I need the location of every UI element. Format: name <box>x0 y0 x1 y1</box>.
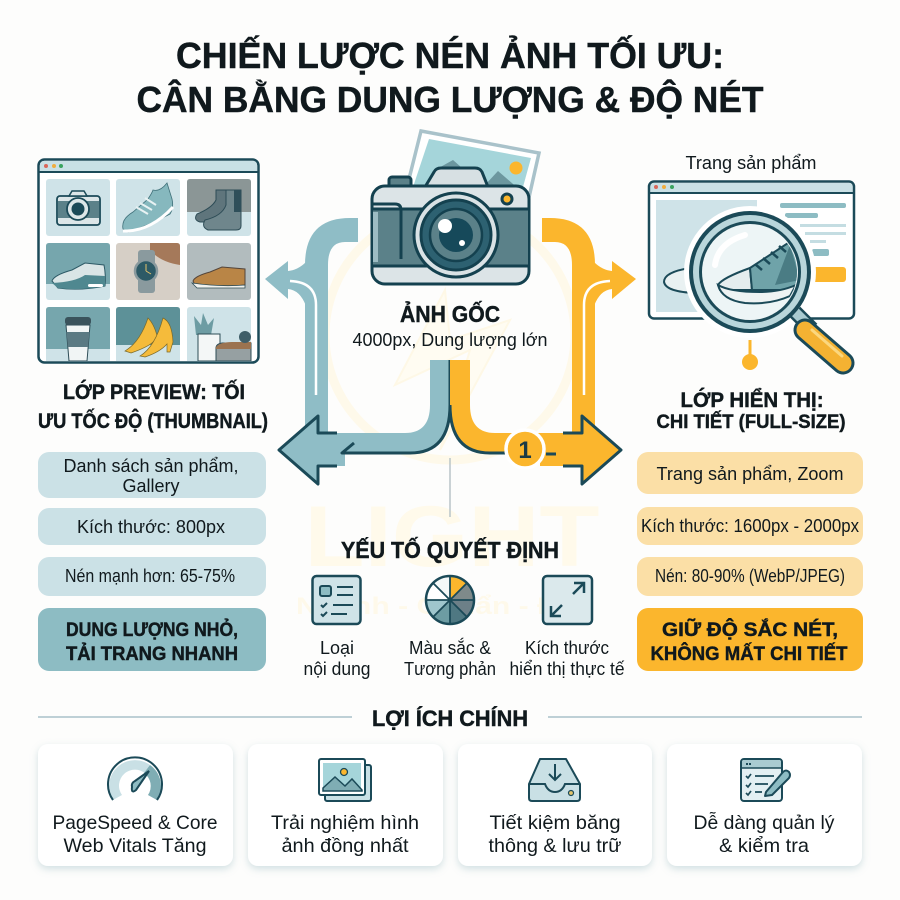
factor: content type: nội dung <box>304 659 370 679</box>
pill: usage: Gallery <box>122 476 180 496</box>
pill: size: Kích thước: 1600px - 2000px <box>641 516 859 536</box>
panel: preview browser window <box>38 160 258 367</box>
source image label <box>352 299 548 350</box>
factor: color and contrast <box>404 576 496 679</box>
watermark: LIGHT <box>304 489 600 585</box>
tile: high heels <box>116 307 180 367</box>
tile: sneaker <box>116 179 180 236</box>
list: preview specs <box>38 452 266 671</box>
icon: checklist with pencil <box>741 759 790 801</box>
heading: display layer: LỚP HIỂN THỊ: <box>680 388 824 412</box>
pill: size: Kích thước: 800px <box>77 517 225 537</box>
factor: color and contrast: Tương phản <box>404 659 496 679</box>
factor: color and contrast: Màu sắc & <box>409 637 491 658</box>
tile: camera <box>46 179 110 236</box>
step badge 1 <box>506 430 544 468</box>
factor: display size <box>510 576 624 679</box>
pill: preview result <box>38 608 266 671</box>
heading: display layer <box>656 388 846 433</box>
pill: display result: KHÔNG MẤT CHI TIẾT <box>650 641 848 665</box>
card: visual experience: Trải nghiệm hình <box>271 812 419 834</box>
pill: usage <box>38 452 266 498</box>
list: display specs <box>637 452 863 671</box>
tile: boots <box>187 179 251 236</box>
card: management <box>667 744 862 866</box>
card: visual experience: ảnh đồng nhất <box>282 835 409 857</box>
heading: preview layer: LỚP PREVIEW: TỐI <box>63 380 245 404</box>
heading: preview layer: ƯU TỐC ĐỘ (THUMBNAIL) <box>38 409 268 433</box>
pill: preview result: TẢI TRANG NHANH <box>66 642 238 665</box>
tile: coffee cup <box>46 307 110 367</box>
factor: display size: Kích thước <box>525 638 609 658</box>
title: CHIẾN LƯỢC NÉN ẢNH TỐI ƯU: <box>176 34 724 76</box>
card: PageSpeed <box>38 744 233 866</box>
pill: usage: Danh sách sản phẩm, <box>64 456 238 476</box>
pill: usage: Trang sản phẩm, Zoom <box>656 464 844 484</box>
card: management: & kiểm tra <box>719 835 809 857</box>
source image label: ẢNH GỐC <box>400 299 500 327</box>
step badge 1: 1 <box>518 437 532 464</box>
icon: camera <box>372 168 529 284</box>
tile: desk still life <box>187 307 251 367</box>
pill: size <box>38 508 266 545</box>
pill: compression <box>637 557 863 596</box>
pill: display result <box>637 608 863 671</box>
label: product page: Trang sản phẩm <box>686 153 816 173</box>
factor: content type: Loại <box>320 638 354 658</box>
pill: preview result: DUNG LƯỢNG NHỎ, <box>66 617 238 641</box>
arrow: yellow flow to display layer <box>450 218 636 484</box>
tile: leather shoe <box>187 243 251 300</box>
card: visual experience <box>248 744 443 866</box>
tile: running shoe <box>46 243 110 300</box>
heading: deciding factors: YẾU TỐ QUYẾT ĐỊNH <box>341 536 559 563</box>
icon: gauge <box>108 757 162 800</box>
title <box>136 34 764 120</box>
icon: source photo behind camera <box>405 131 539 215</box>
arrow: blue flow to preview layer <box>265 218 450 484</box>
heading: preview layer <box>38 380 268 433</box>
card: PageSpeed: PageSpeed & Core <box>52 812 218 834</box>
watermark: Nhanh - Chuẩn - Đẹp <box>296 593 594 620</box>
title: CÂN BẰNG DUNG LƯỢNG & ĐỘ NÉT <box>136 78 764 120</box>
pill: usage <box>637 452 863 494</box>
icon: magnifier over shoe <box>684 206 843 363</box>
card: PageSpeed: Web Vitals Tăng <box>64 835 206 857</box>
watermark <box>296 210 600 620</box>
factor: content type <box>304 576 370 679</box>
card: bandwidth and storage <box>458 744 652 866</box>
tile: watch <box>116 243 180 300</box>
factor: display size: hiển thị thực tế <box>510 659 624 679</box>
icon: image stack <box>319 759 371 801</box>
pill: compression: Nén: 80-90% (WebP/JPEG) <box>655 566 845 586</box>
marker pin <box>742 340 758 370</box>
card: bandwidth and storage: thông & lưu trữ <box>488 835 622 857</box>
connector line <box>449 458 451 517</box>
icon: download tray <box>529 759 580 801</box>
pill: compression <box>38 557 266 596</box>
heading: key benefits: LỢI ÍCH CHÍNH <box>372 706 528 731</box>
card: management: Dễ dàng quản lý <box>694 811 835 834</box>
card: bandwidth and storage: Tiết kiệm băng <box>490 812 620 834</box>
source image label: 4000px, Dung lượng lớn <box>352 330 548 350</box>
heading: display layer: CHI TIẾT (FULL-SIZE) <box>656 410 846 433</box>
pill: display result: GIỮ ĐỘ SẮC NÉT, <box>662 617 838 641</box>
pill: size <box>637 507 863 545</box>
panel: product page browser window <box>649 182 854 318</box>
pill: compression: Nén mạnh hơn: 65-75% <box>65 566 235 586</box>
